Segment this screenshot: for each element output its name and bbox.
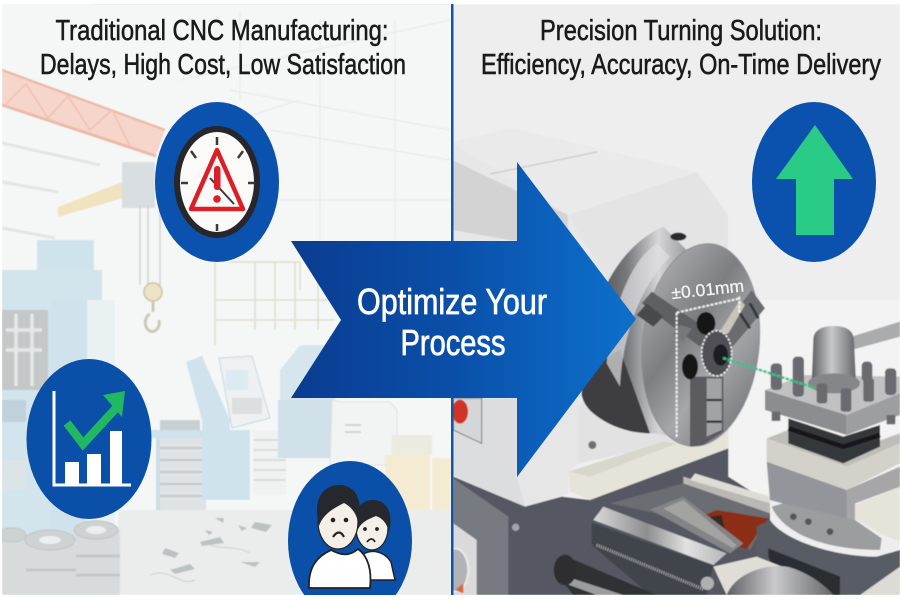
arrow label: Optimize Your: [357, 281, 547, 322]
heading: traditional manufacturing: [40, 15, 406, 81]
small customer: [355, 500, 395, 580]
upper rail and red gap: [683, 477, 770, 513]
post body and handle: [852, 322, 900, 350]
clamp bolts: [771, 357, 896, 424]
icon: green up arrow: [752, 102, 876, 262]
control pedestal: [186, 356, 230, 430]
icon: unhappy customers: [288, 461, 412, 600]
tool post assembly: [713, 322, 900, 595]
lathe chuck: [582, 227, 769, 452]
lower blocks: [766, 462, 848, 518]
bed: [453, 448, 770, 595]
overhead crane: [2, 70, 165, 156]
cream ledge: [568, 433, 728, 500]
heading: precision turning solution: [481, 15, 882, 81]
heading: traditional manufacturing: Traditional CNC Manufacturing:: [56, 15, 388, 47]
main slide rail: [593, 507, 727, 565]
headstock housing, lower: [454, 392, 770, 595]
large customer: [309, 485, 370, 588]
panel: precision turning lathe: [442, 4, 900, 595]
icon: clock with warning triangle: [155, 102, 279, 262]
square tool holder plate: [765, 375, 900, 415]
dimension lines: [677, 297, 740, 438]
pipes and windows: [215, 262, 335, 345]
green laser line: [723, 358, 815, 388]
heading: traditional manufacturing: Delays, High Cost, Low Satisfaction: [40, 49, 406, 81]
panel: traditional CNC manufacturing factory background: [0, 4, 451, 595]
metal spools: [2, 530, 120, 595]
heading: precision turning solution: Precision Turning Solution:: [540, 15, 822, 47]
left blue machine: [37, 240, 94, 272]
right machines and cabinets: [280, 345, 335, 400]
workbench: [150, 430, 210, 438]
roof and wall lines: [90, 4, 450, 202]
arrow label: [357, 281, 547, 363]
arrow label: Process: [400, 322, 506, 363]
arrow: optimize your process: [291, 162, 636, 477]
headstock housing, upper: [452, 128, 728, 360]
lead screw: [566, 560, 655, 595]
blue center divider: [451, 4, 454, 595]
rotary disc and base: [772, 503, 882, 550]
label: tolerance: ±0.01mm: [670, 276, 745, 303]
jaws: [642, 292, 713, 347]
icon: chart with green check arrow: [26, 359, 152, 519]
shop floor and debris: [118, 510, 451, 595]
